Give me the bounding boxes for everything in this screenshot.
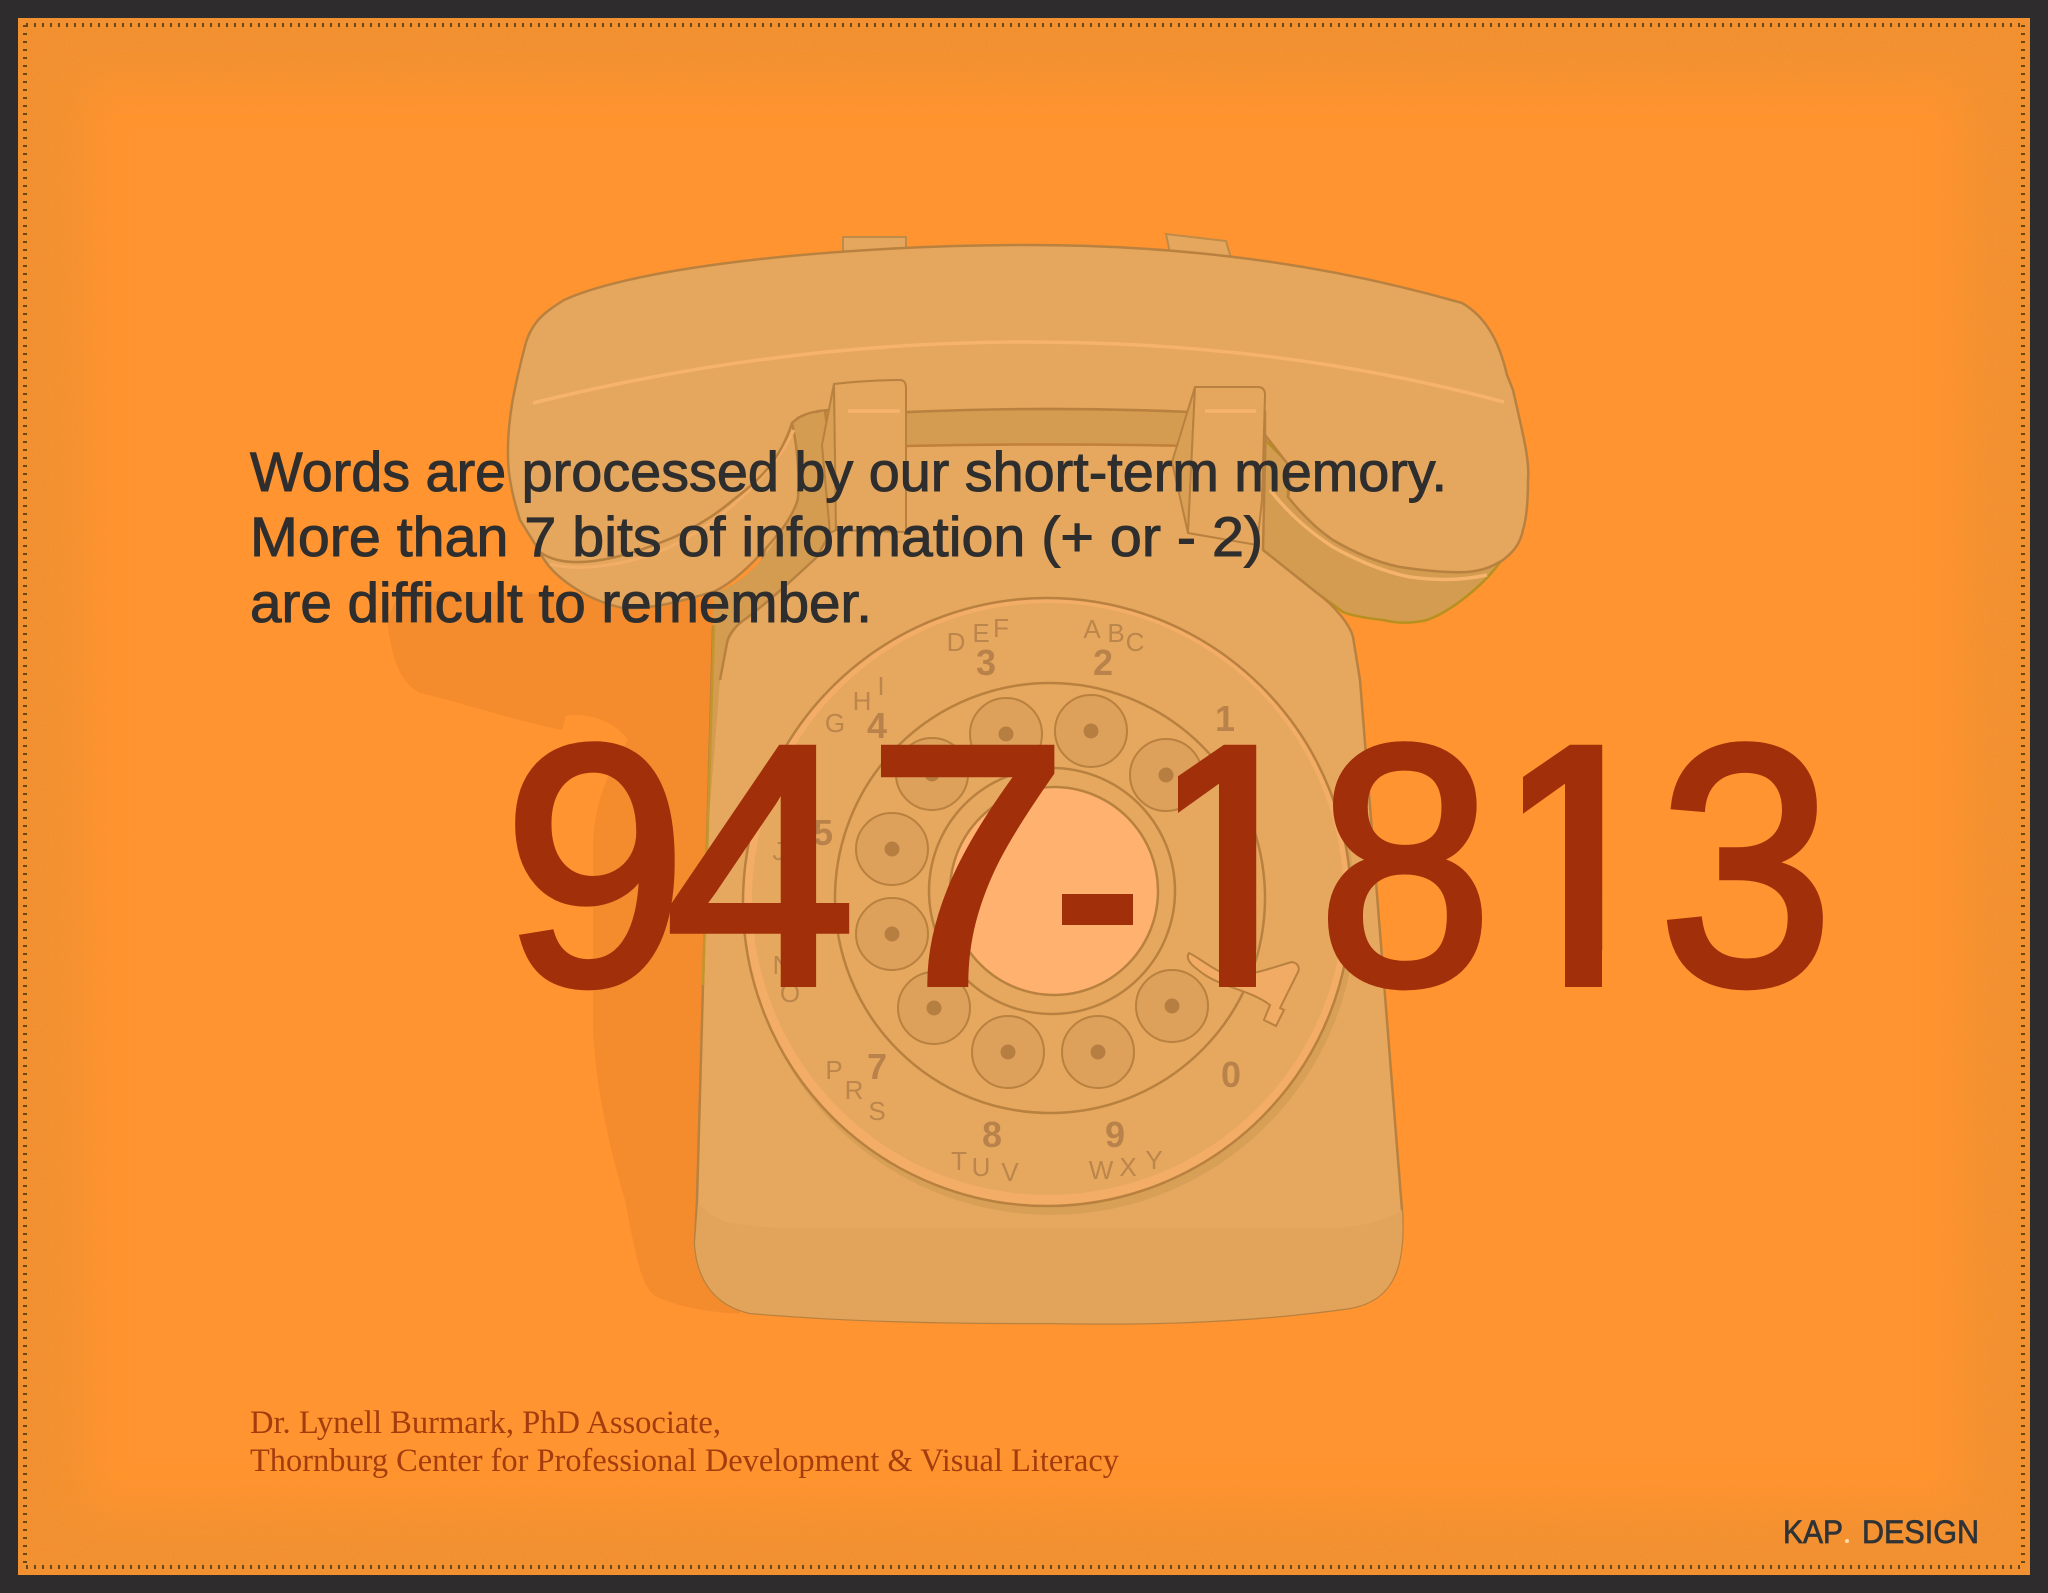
dial letters: P: [825, 1055, 843, 1085]
dial digits: 1: [1215, 698, 1235, 739]
olive left line: [703, 625, 714, 985]
neck outline: [720, 533, 830, 680]
dial letters: X: [1119, 1152, 1137, 1182]
left neck underside: [713, 410, 830, 627]
dial digits: 5: [813, 812, 833, 853]
big phone number: 3: [1658, 674, 1834, 1056]
earpiece lip left: [540, 423, 799, 608]
dial letters: A: [1083, 614, 1101, 644]
dial digits: [813, 642, 1241, 1155]
dial letters: S: [868, 1096, 886, 1126]
cradle band: [825, 409, 1195, 446]
dial letters: H: [853, 686, 871, 716]
dial letters: F: [993, 613, 1009, 643]
headline text: [250, 440, 1447, 634]
dial digits: 7: [867, 1046, 887, 1087]
headline text: are difficult to remember.: [250, 571, 872, 634]
brand mark: DESIGN: [1862, 1514, 1979, 1550]
big phone number: 4: [666, 674, 856, 1056]
dial letters: N: [773, 950, 791, 980]
brand mark: KAP: [1783, 1514, 1843, 1550]
dial digits: 8: [982, 1114, 1002, 1155]
finger holes: [856, 695, 1208, 1088]
lobe highlight: [1270, 490, 1487, 579]
dial digits: 4: [867, 705, 887, 746]
center label: [950, 787, 1158, 995]
lip highlight: [550, 430, 794, 567]
dial shadow: [746, 605, 1356, 1215]
dial letters: W: [1089, 1155, 1114, 1185]
dial letters: C: [1126, 627, 1144, 657]
left cradle prong: [822, 380, 906, 533]
handset highlight: [533, 342, 1504, 403]
dial digits: 9: [1105, 1114, 1125, 1155]
dial letters: V: [1001, 1157, 1019, 1187]
telephone body: [695, 412, 1402, 1324]
big phone number: 8: [1318, 674, 1492, 1056]
source credit: Thornburg Center for Professional Development & Visual Literacy: [250, 1443, 1119, 1479]
base shelf: [695, 1203, 1402, 1324]
center ring: [929, 768, 1175, 1014]
dial letters: U: [972, 1152, 990, 1182]
dial letters: I: [877, 671, 885, 701]
source credit: [250, 1405, 1119, 1479]
dial letters: G: [825, 708, 845, 738]
dial plate: [743, 598, 1351, 1206]
right cradle prong: [1172, 387, 1265, 545]
dial letters: Y: [1145, 1145, 1163, 1175]
handset top: [508, 245, 1528, 572]
headline text: Words are processed by our short-term memory.: [250, 440, 1447, 503]
dial letters: E: [972, 618, 990, 648]
telephone: [508, 234, 1528, 1324]
finger stop: [1188, 953, 1299, 1026]
dial letters: [772, 613, 1163, 1187]
handset tabs: [843, 234, 1231, 258]
finger wheel: [835, 683, 1265, 1113]
big phone number: [515, 741, 1823, 990]
telephone shadow: [387, 590, 760, 1314]
big phone number: 1: [1482, 674, 1673, 1056]
big phone number: 1: [1136, 674, 1327, 1056]
big phone number: 7: [866, 674, 1069, 1056]
handset underside right: [1255, 430, 1503, 623]
big phone number: 9: [503, 674, 687, 1056]
headline text: More than 7 bits of information (+ or - 2): [250, 505, 1263, 568]
dial letters: D: [947, 627, 965, 657]
dial digits: 2: [1093, 642, 1113, 683]
dial digits: 0: [1221, 1054, 1241, 1095]
dial letters: B: [1107, 618, 1125, 648]
dial letters: T: [951, 1146, 967, 1176]
hole dots: [884, 724, 1180, 1060]
prong highlights: [848, 409, 1256, 413]
dial letters: O: [780, 978, 800, 1008]
source credit: Dr. Lynell Burmark, PhD Associate,: [250, 1405, 721, 1441]
brand mark: [1783, 1514, 1979, 1550]
dial digits: 3: [976, 642, 996, 683]
dial letters: J: [772, 836, 786, 866]
dial letters: R: [845, 1075, 863, 1105]
body left side strip: [708, 623, 740, 830]
